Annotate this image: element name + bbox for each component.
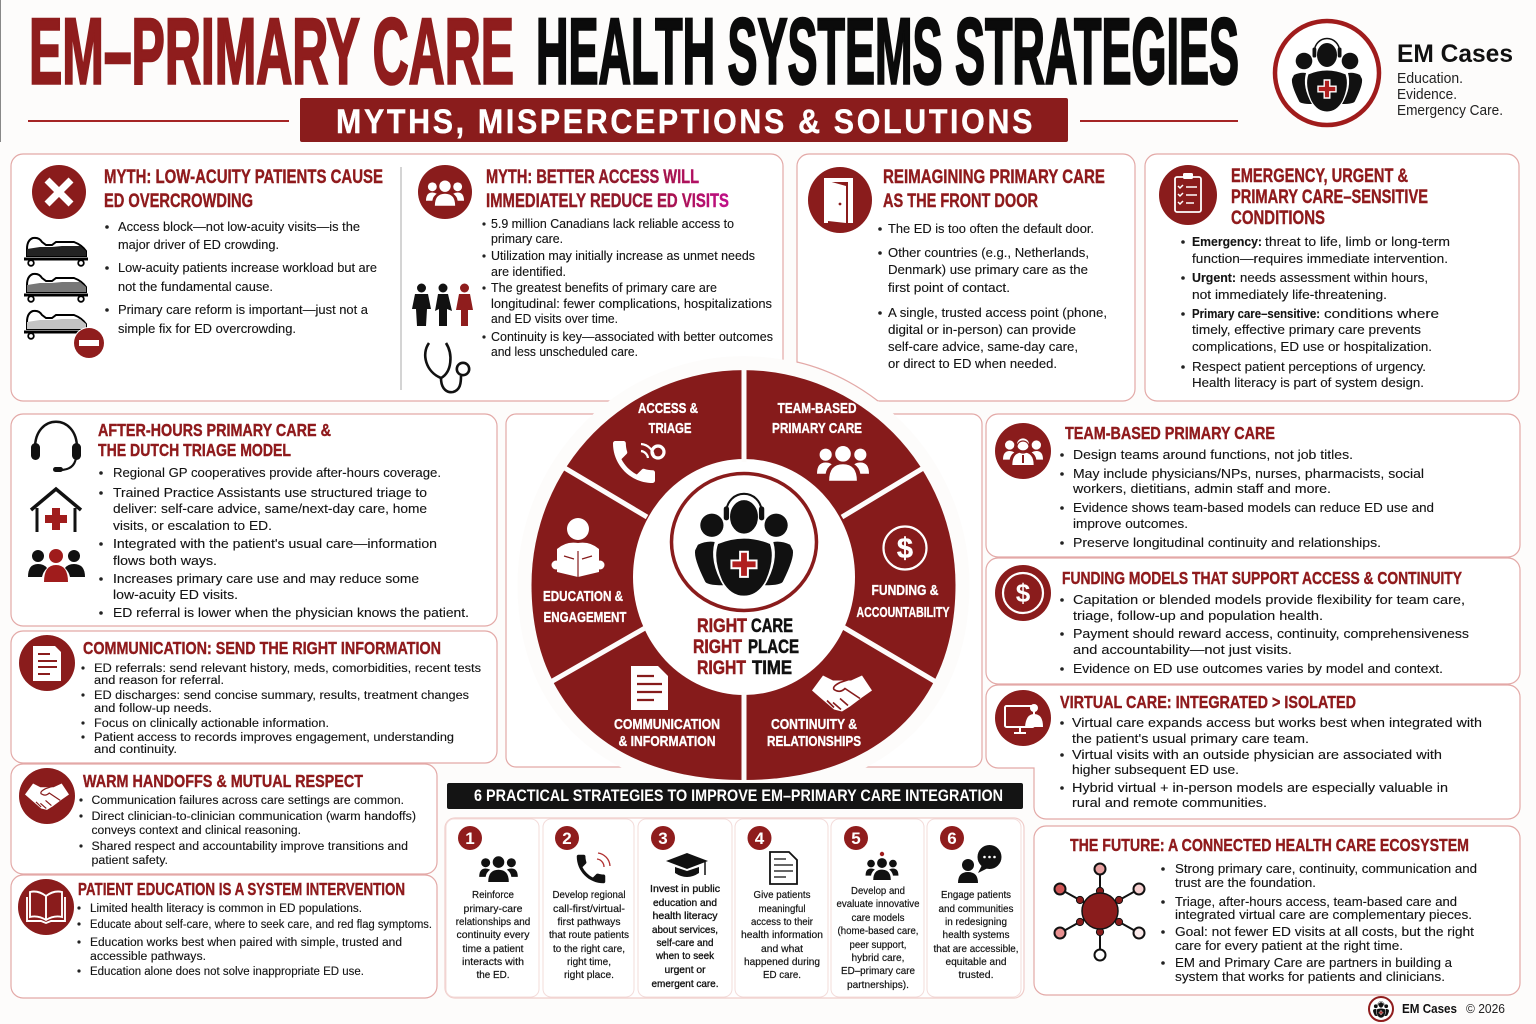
card 3: public education: health literacy: [652, 910, 718, 922]
card 5: innovative care models: [831, 819, 924, 997]
text: better access bullets: Continuity is key—associated with better outcomes: [491, 330, 773, 344]
wheel segment: access and triage: TRIAGE: [648, 420, 692, 437]
text: after-hours bullets: Regional GP cooperatives provide after-hours coverage.: [113, 465, 441, 480]
card 1: reinforce relationships: interacts with: [462, 956, 524, 968]
text: future bullets: trust are the foundation.: [1175, 875, 1316, 890]
card 5: innovative care models: care models: [852, 912, 904, 924]
wheel segment: communication and information: [614, 666, 720, 750]
text: warm handoffs bullets: conveys context and clinical reasoning.: [92, 825, 301, 837]
text: reimagining bullets: digital or in-person) can provide: [888, 322, 1076, 337]
text: warm handoffs bullets: Communication failures across care settings are common.: [92, 795, 404, 807]
card 3: public education: education and: [653, 897, 717, 909]
text: emergency bullets: Primary care–sensitive:: [1192, 306, 1320, 321]
text: after-hours bullets: ED referral is lower when the physician knows the patient.: [113, 605, 469, 620]
card 6: engage patients and communities: and communities: [938, 903, 1014, 915]
text: warm handoffs bullets: Direct clinician-to-clinician communication (warm handoffs): [92, 811, 416, 823]
text: after-hours bullets: flows both ways.: [113, 553, 217, 568]
card 3: public education: emergent care.: [652, 978, 718, 990]
card 1: reinforce relationships: continuity every: [456, 929, 530, 941]
wheel segment: communication and information: COMMUNICATION: [614, 716, 720, 733]
text: low acuity bullets: Access block—not low-acuity visits—is the: [118, 219, 360, 234]
heading: six practical strategies: 6 PRACTICAL STRATEGIES TO IMPROVE EM–PRIMARY CARE INTEGRATION: [474, 786, 1003, 805]
text: team-based bullets: May include physicians/NPs, nurses, pharmacists, social: [1073, 466, 1424, 481]
text: future bullets: system that works for patients and clinicians.: [1175, 969, 1445, 984]
card 3: public education: Invest in public: [650, 883, 720, 895]
icon: people group: [28, 549, 85, 582]
card 5: innovative care models: evaluate innovative: [836, 898, 920, 910]
text: patient education bullets: Education alone does not solve inappropriate ED use.: [90, 966, 364, 978]
heading: after-hours: [98, 420, 331, 460]
card 5: innovative care models: hybrid care,: [852, 952, 904, 964]
text: virtual care bullets: [1060, 715, 1482, 810]
card 5: innovative care models: (home-based care,: [838, 925, 918, 937]
card 4: patient access to information: [735, 819, 828, 997]
text: emergency bullets: timely, effective primary care prevents: [1192, 322, 1422, 337]
text: right care right place right time: CARE: [751, 615, 793, 637]
card 5: innovative care models: ED–primary care: [841, 965, 915, 977]
card 4: patient access to information: happened during: [744, 956, 820, 968]
text: emergency bullets: Health literacy is part of system design.: [1192, 375, 1424, 390]
wheel segment: team-based primary care: TEAM-BASED: [778, 400, 857, 417]
text: funding bullets: Payment should reward access, continuity, comprehensiveness: [1073, 626, 1470, 641]
card 5: innovative care models: 5: [851, 829, 861, 848]
chart: strategy wheel: [532, 366, 956, 784]
icon: handshake circle: [19, 768, 75, 824]
heading: after-hours: THE DUTCH TRIAGE MODEL: [98, 440, 291, 460]
heading: reimagining: [883, 166, 1105, 212]
text: low acuity bullets: [105, 219, 377, 336]
card 2: call-first pathways: that route patients: [549, 929, 629, 941]
text: after-hours bullets: visits, or escalation to ED.: [113, 518, 272, 533]
text: after-hours bullets: deliver: self-care advice, same/next-day care, home: [113, 501, 427, 516]
card 6: engage patients and communities: 6: [947, 829, 957, 848]
text: better access bullets: [482, 217, 773, 359]
icon: document circle: [19, 635, 75, 691]
text: emergency bullets: Emergency:: [1192, 234, 1262, 249]
card 2: call-first pathways: to the right care,: [553, 943, 625, 955]
card 4: patient access to information: access to their: [751, 916, 813, 928]
text: emergency bullets: complications, ED use or hospitalization.: [1192, 339, 1432, 354]
text: low acuity bullets: Low-acuity patients increase workload but are: [118, 260, 377, 275]
icon: dollar circle: $: [1016, 578, 1031, 608]
text: patient education bullets: accessible pathways.: [90, 951, 206, 963]
card 1: reinforce relationships: 1: [465, 829, 475, 848]
logo: EM Cases: [1275, 21, 1513, 125]
wheel segment: education and engagement: EDUCATION &: [543, 588, 623, 605]
text: emergency bullets: function—requires immediate intervention.: [1192, 251, 1448, 266]
card 4: patient access to information: health information: [741, 929, 823, 941]
text: right care right place right time: RIGHT: [697, 615, 747, 637]
text: better access bullets: Utilization may initially increase as unmet needs: [491, 249, 755, 263]
text: communication bullets: Focus on clinically actionable information.: [94, 718, 329, 730]
panel: team-based primary care: [986, 414, 1520, 557]
wheel centre logo: [672, 474, 816, 610]
text: virtual care bullets: rural and remote communities.: [1072, 795, 1267, 810]
card 2: call-first pathways: right place.: [564, 969, 614, 981]
panel: virtual care: [986, 685, 1520, 819]
wheel segment: education and engagement: ENGAGEMENT: [544, 609, 626, 626]
text: better access bullets: 5.9 million Canadians lack reliable access to: [491, 217, 734, 231]
title: EM–PRIMARY CARE: [29, 0, 514, 104]
card 3: public education: [638, 819, 732, 997]
heading: reimagining: REIMAGINING PRIMARY CARE: [883, 166, 1105, 188]
card 3: public education: self-care and: [656, 937, 714, 949]
text: better access bullets: and ED visits over time.: [491, 312, 618, 326]
text: emergency bullets: needs assessment within hours,: [1240, 270, 1428, 285]
text: reimagining bullets: first point of contact.: [888, 280, 1010, 295]
heading: emergency urgent: EMERGENCY, URGENT &: [1231, 165, 1408, 187]
text: better access bullets: and less unscheduled care.: [491, 345, 638, 359]
text: future bullets: Goal: not fewer ED visits at all costs, but the right: [1175, 924, 1474, 939]
icon: clinic house: [31, 489, 81, 532]
text: future bullets: [1161, 861, 1477, 984]
wheel segment: team-based primary care: PRIMARY CARE: [772, 420, 862, 437]
text: after-hours bullets: Trained Practice Assistants use structured triage to: [113, 485, 427, 500]
heading: myth low acuity: [104, 166, 383, 212]
footer: logo and copyright: EM Cases: [1402, 1001, 1457, 1016]
panel: emergency urgent and primary care sensitive: [1145, 154, 1519, 401]
text: communication bullets: ED discharges: send concise summary, results, treatment changes: [94, 690, 469, 702]
card 4: patient access to information: Give patients: [754, 889, 810, 901]
card 3: public education: urgent or: [664, 964, 706, 976]
subtitle banner: MYTHS, MISPERCEPTIONS & SOLUTIONS: [336, 103, 1035, 141]
heading: reimagining: AS THE FRONT DOOR: [883, 190, 1038, 212]
text: right care right place right time: PLACE: [748, 636, 799, 658]
icon: three people figures: [412, 284, 473, 326]
card 4: patient access to information: 4: [755, 829, 765, 848]
text: low acuity bullets: major driver of ED crowding.: [118, 237, 279, 252]
text: communication bullets: Patient access to records improves engagement, understanding: [94, 732, 454, 744]
card 6: engage patients and communities: Engage patients: [941, 889, 1011, 901]
footer: logo and copyright: [1369, 997, 1505, 1021]
card 6: engage patients and communities: trusted.: [958, 969, 994, 981]
text: warm handoffs bullets: patient safety.: [92, 855, 168, 867]
icon: virtual monitor circle: [995, 690, 1051, 746]
heading: team-based: TEAM-BASED PRIMARY CARE: [1065, 423, 1275, 443]
text: patient education bullets: [77, 903, 432, 978]
text: reimagining bullets: [878, 221, 1107, 371]
text: better access bullets: longitudinal: fewer complications, hospitalizations: [491, 297, 772, 311]
heading: myth better access: [486, 166, 729, 212]
text: low acuity bullets: not the fundamental cause.: [118, 279, 273, 294]
text: low acuity bullets: Primary care reform is important—just not a: [118, 302, 369, 317]
icon: clipboard: [1159, 165, 1217, 225]
wheel segment: funding and accountability: FUNDING &: [872, 582, 939, 599]
panel: patient education: [11, 875, 437, 998]
icon: connected network: [1054, 864, 1144, 960]
text: communication bullets: ED referrals: send relevant history, meds, comorbidities, recent tests: [94, 663, 481, 675]
heading: emergency urgent: PRIMARY CARE–SENSITIVE: [1231, 186, 1428, 208]
icon: team circle: [995, 423, 1051, 479]
footer: logo and copyright: © 2026: [1466, 1002, 1505, 1016]
text: future bullets: EM and Primary Care are partners in building a: [1175, 955, 1453, 970]
text: reimagining bullets: The ED is too often the default door.: [888, 221, 1094, 236]
heading: myth low acuity: MYTH: LOW-ACUITY PATIENTS CAUSE: [104, 166, 383, 188]
wheel segment: funding and accountability: ACCOUNTABILITY: [856, 604, 950, 621]
card 2: call-first pathways: right time,: [567, 956, 611, 968]
text: after-hours bullets: [99, 465, 469, 620]
text: team-based bullets: improve outcomes.: [1073, 516, 1188, 531]
text: communication bullets: and follow-up needs.: [94, 703, 212, 715]
text: warm handoffs bullets: Shared respect and accountability improve transitions and: [92, 841, 408, 853]
wheel segment: continuity and relationships: RELATIONSHIPS: [767, 733, 861, 750]
heading: patient education: PATIENT EDUCATION IS A SYSTEM INTERVENTION: [78, 879, 405, 899]
text: funding bullets: [1060, 592, 1470, 676]
text: funding bullets: Capitation or blended models provide flexibility for team care,: [1073, 592, 1465, 607]
card 6: engage patients and communities: in redesigning: [945, 916, 1007, 928]
panel: funding models: [986, 558, 1520, 684]
text: patient education bullets: Educate about self-care, where to seek care, and red flag symptoms.: [90, 919, 432, 931]
panel: strategy cards: [445, 818, 1024, 998]
text: after-hours bullets: low-acuity ED visits.: [113, 587, 238, 602]
panel: myths: [11, 154, 783, 401]
icon: group in circle: [418, 165, 472, 219]
card 3: public education: about services,: [652, 924, 718, 936]
card 1: reinforce relationships: relationships and: [456, 916, 530, 928]
card 6: engage patients and communities: that are accessible,: [934, 943, 1018, 955]
card 2: call-first pathways: [543, 819, 634, 997]
heading: myth low acuity: ED OVERCROWDING: [104, 190, 253, 212]
heading: myth better access: IMMEDIATELY REDUCE ED VISITS: [486, 190, 729, 212]
card 6: engage patients and communities: [927, 819, 1021, 997]
text: future bullets: integrated virtual care are complementary pieces.: [1175, 907, 1472, 922]
wheel segment: access and triage: ACCESS &: [638, 400, 698, 417]
panel: the future: [1034, 826, 1520, 995]
heading: communication: COMMUNICATION: SEND THE RIGHT INFORMATION: [83, 638, 441, 658]
panel: reimagining primary care: [797, 154, 1135, 401]
card 1: reinforce relationships: primary-care: [464, 903, 523, 915]
heading: myth better access: MYTH: BETTER ACCESS WILL: [486, 166, 699, 188]
card 6: engage patients and communities: health systems: [942, 929, 1010, 941]
text: better access bullets: primary care.: [491, 232, 563, 246]
card 5: innovative care models: partnerships).: [847, 979, 909, 991]
text: future bullets: Triage, after-hours access, team-based care and: [1175, 894, 1457, 909]
wheel segment: communication and information: & INFORMATION: [618, 733, 716, 750]
text: patient education bullets: Limited health literacy is common in ED populations.: [90, 903, 362, 915]
card 6: engage patients and communities: equitable and: [946, 956, 1007, 968]
text: communication bullets: and continuity.: [94, 744, 177, 756]
text: patient education bullets: Education works best when paired with simple, trusted and: [90, 937, 402, 949]
text: funding bullets: Evidence on ED use outcomes varies by model and context.: [1073, 661, 1443, 676]
text: team-based bullets: Preserve longitudinal continuity and relationships.: [1073, 535, 1381, 550]
text: better access bullets: The greatest benefits of primary care are: [491, 281, 717, 295]
logo: EM Cases: Education.: [1397, 71, 1463, 87]
text: emergency bullets: conditions where: [1324, 307, 1439, 321]
text: right care right place right time: [693, 615, 799, 679]
text: funding bullets: and accountability—not just visits.: [1073, 642, 1292, 657]
text: virtual care bullets: Hybrid virtual + in-person models are especially valuable in: [1072, 780, 1448, 795]
text: emergency bullets: Respect patient perceptions of urgency.: [1192, 359, 1426, 374]
card 4: patient access to information: ED care.: [763, 969, 801, 981]
logo: EM Cases: Evidence.: [1397, 87, 1457, 103]
text: virtual care bullets: the patient's usual primary care team.: [1072, 731, 1309, 746]
text: reimagining bullets: Other countries (e.g., Netherlands,: [888, 245, 1089, 260]
text: team-based bullets: Evidence shows team-based models can reduce ED use and: [1073, 500, 1434, 515]
text: future bullets: care for every patient at the right time.: [1175, 938, 1403, 953]
text: emergency bullets: [1181, 234, 1450, 390]
wheel halo: white clearing around wheel: [532, 362, 956, 780]
heading: virtual care: VIRTUAL CARE: INTEGRATED > ISOLATED: [1060, 692, 1356, 712]
panel: after-hours primary care: [11, 414, 497, 626]
card 3: public education: when to seek: [655, 950, 715, 962]
icon: open book circle: [18, 879, 74, 935]
card 4: patient access to information: meaningful: [758, 903, 806, 915]
card 2: call-first pathways: first pathways: [558, 916, 620, 928]
panel: warm handoffs: [11, 764, 437, 874]
text: emergency bullets: not immediately life-threatening.: [1192, 287, 1387, 302]
heading: six practical strategies: [447, 783, 1023, 809]
text: right care right place right time: RIGHT: [693, 636, 742, 658]
text: better access bullets: are identified.: [491, 265, 566, 279]
card 1: reinforce relationships: the ED.: [476, 969, 510, 981]
text: right care right place right time: TIME: [752, 657, 792, 679]
wheel segment: team-based primary care: [772, 400, 869, 481]
text: emergency bullets: threat to life, limb or long-term: [1265, 234, 1450, 249]
card 3: public education: 3: [658, 829, 668, 848]
icon: dollar circle: [995, 565, 1051, 621]
text: reimagining bullets: or direct to ED when needed.: [888, 356, 1057, 371]
text: virtual care bullets: Virtual care expands access but works best when integrated with: [1072, 715, 1482, 730]
text: warm handoffs bullets: [79, 795, 416, 867]
text: virtual care bullets: Virtual visits with an outside physician are associated with: [1072, 747, 1442, 762]
text: future bullets: Strong primary care, continuity, communication and: [1175, 861, 1477, 876]
logo: EM Cases: Emergency Care.: [1397, 103, 1503, 119]
wheel segment: access and triage: [613, 400, 698, 483]
text: right care right place right time: RIGHT: [697, 657, 746, 679]
wheel segment: continuity and relationships: [767, 676, 872, 750]
text: reimagining bullets: self-care advice, same-day care,: [888, 339, 1078, 354]
card 1: reinforce relationships: time a patient: [462, 943, 524, 955]
text: funding bullets: triage, follow-up and population health.: [1073, 608, 1323, 623]
icon: door: [808, 167, 872, 233]
text: low acuity bullets: simple fix for ED overcrowding.: [118, 321, 296, 336]
text: communication bullets: [81, 663, 481, 756]
card 5: innovative care models: peer support,: [850, 939, 906, 951]
card 4: patient access to information: and what: [761, 943, 803, 955]
card 2: call-first pathways: 2: [562, 829, 572, 848]
text: team-based bullets: workers, dietitians, admin staff and more.: [1072, 481, 1331, 496]
card 2: call-first pathways: Develop regional: [552, 889, 626, 901]
card 2: call-first pathways: call-first/virtual-: [553, 903, 626, 915]
panel: central wheel frame: [506, 414, 982, 767]
icon: stethoscope: [425, 343, 469, 392]
icon: beds: [24, 238, 105, 359]
panel: communication: [11, 631, 497, 763]
text: emergency bullets: Urgent:: [1192, 270, 1236, 285]
heading: warm handoffs: WARM HANDOFFS & MUTUAL RESPECT: [83, 771, 363, 791]
text: reimagining bullets: Denmark) use primary care as the: [888, 262, 1088, 277]
icon: X in circle: [32, 165, 86, 219]
text: team-based bullets: [1060, 447, 1434, 550]
wheel segment: continuity and relationships: CONTINUITY &: [771, 716, 857, 733]
wheel segment: funding and accountability: $: [897, 533, 913, 565]
heading: after-hours: AFTER-HOURS PRIMARY CARE &: [98, 420, 331, 440]
wheel segment: education and engagement: [543, 518, 626, 626]
heading: emergency urgent: CONDITIONS: [1231, 207, 1325, 229]
text: virtual care bullets: higher subsequent ED use.: [1072, 762, 1239, 777]
heading: emergency urgent: [1231, 165, 1428, 229]
text: after-hours bullets: Increases primary care use and may reduce some: [113, 571, 419, 586]
icon: headset: [31, 422, 81, 472]
text: after-hours bullets: Integrated with the patient's usual care—information: [113, 536, 437, 551]
card 5: innovative care models: Develop and: [851, 885, 905, 897]
subtitle banner: [28, 98, 1238, 142]
card 1: reinforce relationships: Reinforce: [472, 889, 514, 901]
text: team-based bullets: Design teams around functions, not job titles.: [1073, 447, 1353, 462]
logo: EM Cases: EM Cases: [1397, 40, 1513, 68]
text: reimagining bullets: A single, trusted access point (phone,: [888, 305, 1107, 320]
card 1: reinforce relationships: [446, 819, 539, 997]
text: communication bullets: and reason for referral.: [94, 675, 224, 687]
wheel segment: funding and accountability: [856, 526, 950, 621]
